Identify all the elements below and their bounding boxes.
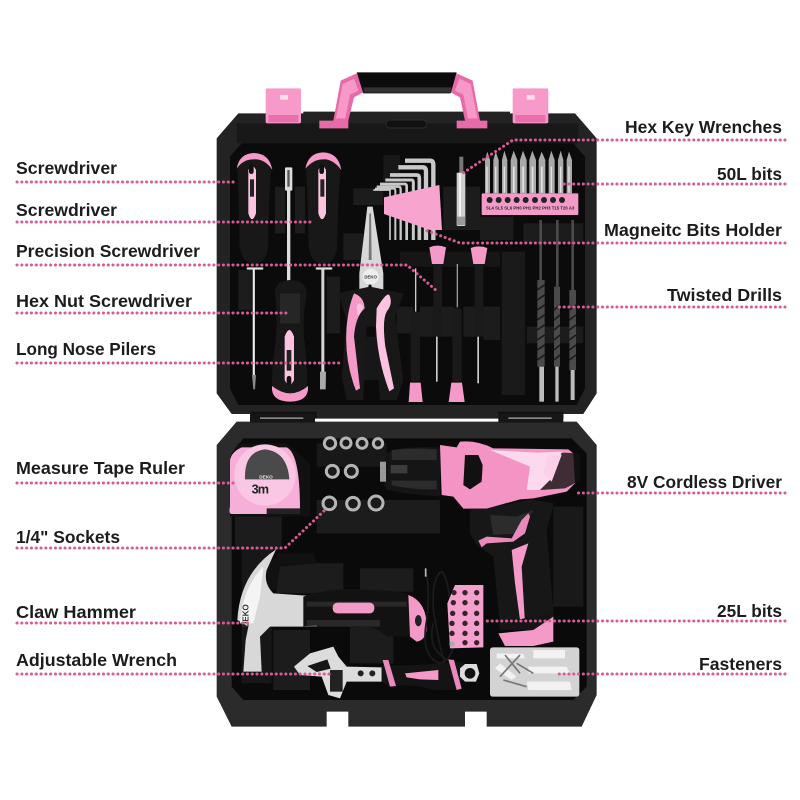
label text: Claw Hammer bbox=[16, 602, 136, 622]
label: Precision Screwdriver bbox=[16, 241, 438, 292]
measure tape ruler: DEKO bbox=[259, 474, 273, 479]
leader line bbox=[17, 220, 312, 224]
adjustable wrench bbox=[294, 647, 479, 698]
label: 1/4 inch Sockets bbox=[16, 510, 325, 548]
lid inner tray bbox=[230, 143, 585, 405]
label text: 50L bits bbox=[717, 164, 782, 184]
label text: Long Nose Pilers bbox=[16, 339, 156, 359]
hex nut screwdriver bbox=[272, 167, 308, 402]
label text: 1/4" Sockets bbox=[16, 527, 120, 547]
latch: left pink clip bbox=[266, 88, 301, 123]
label text: Hex Key Wrenches bbox=[625, 117, 782, 137]
leader line bbox=[485, 620, 785, 622]
base hinges bbox=[250, 413, 563, 423]
label text: Adjustable Wrench bbox=[16, 650, 177, 670]
label text: Measure Tape Ruler bbox=[16, 458, 185, 478]
leader line bbox=[460, 140, 785, 175]
leader line bbox=[425, 230, 785, 243]
leader line bbox=[17, 312, 288, 314]
carrying handle bbox=[319, 72, 487, 128]
charging cable bbox=[425, 568, 454, 663]
screwdriver, left bbox=[237, 153, 272, 389]
label text: 8V Cordless Driver bbox=[627, 472, 782, 492]
measure tape ruler: 3m bbox=[252, 482, 269, 496]
lid outer shell bbox=[217, 112, 597, 419]
leader line bbox=[558, 306, 785, 308]
leader line bbox=[17, 482, 235, 484]
lid front band bbox=[237, 120, 578, 143]
base foam moulding bbox=[235, 443, 583, 690]
long nose pliers bbox=[338, 207, 403, 400]
precision screwdrivers bbox=[409, 246, 487, 402]
leader line bbox=[17, 180, 237, 184]
leader line bbox=[560, 182, 785, 186]
magnetic bits holder bbox=[457, 157, 465, 226]
leader line bbox=[575, 492, 785, 494]
label text: Precision Screwdriver bbox=[16, 241, 200, 261]
quarter inch sockets bbox=[323, 438, 383, 510]
hex key pink holder bbox=[384, 185, 442, 230]
50L bits row: SL4 SL5 SL6 PH0 PH1 PH2 PH3 T15 T20 A3 bbox=[486, 206, 575, 211]
leader line bbox=[17, 510, 325, 548]
claw hammer: DEKO bbox=[242, 604, 251, 627]
claw hammer bbox=[237, 549, 427, 672]
fasteners box bbox=[490, 647, 579, 697]
hex key wrench set bbox=[373, 161, 433, 240]
latch: right pink clip bbox=[513, 88, 548, 123]
label text: Screwdriver bbox=[16, 200, 117, 220]
label text: Twisted Drills bbox=[667, 285, 782, 305]
label text: Hex Nut Screwdriver bbox=[16, 291, 192, 311]
base outer shell bbox=[217, 422, 597, 727]
leader line bbox=[17, 622, 248, 624]
label: Hex Key Wrenches bbox=[460, 117, 785, 175]
label text: Fasteners bbox=[699, 654, 782, 674]
leader line bbox=[557, 672, 785, 676]
tray foam moulding bbox=[238, 155, 583, 395]
leader line bbox=[17, 362, 342, 364]
label text: 25L bits bbox=[717, 601, 782, 621]
base inner tray bbox=[232, 438, 587, 700]
label: Magneitc Bits Holder bbox=[425, 220, 785, 243]
leader line bbox=[17, 672, 330, 676]
label text: Magneitc Bits Holder bbox=[604, 220, 782, 240]
8V cordless driver bbox=[380, 441, 580, 646]
leader line bbox=[17, 265, 438, 292]
25L bits block bbox=[447, 585, 483, 648]
measure tape ruler bbox=[229, 443, 310, 517]
label text: Screwdriver bbox=[16, 158, 117, 178]
50L bits row bbox=[482, 151, 578, 215]
open case, lower base with tools bbox=[217, 413, 597, 727]
long nose pliers: DEKO bbox=[364, 274, 378, 279]
lid hinges bbox=[250, 412, 563, 418]
screwdriver, middle with slotted tip bbox=[305, 152, 341, 389]
open case, upper lid with tools bbox=[217, 72, 597, 419]
twisted drills bbox=[537, 220, 576, 402]
